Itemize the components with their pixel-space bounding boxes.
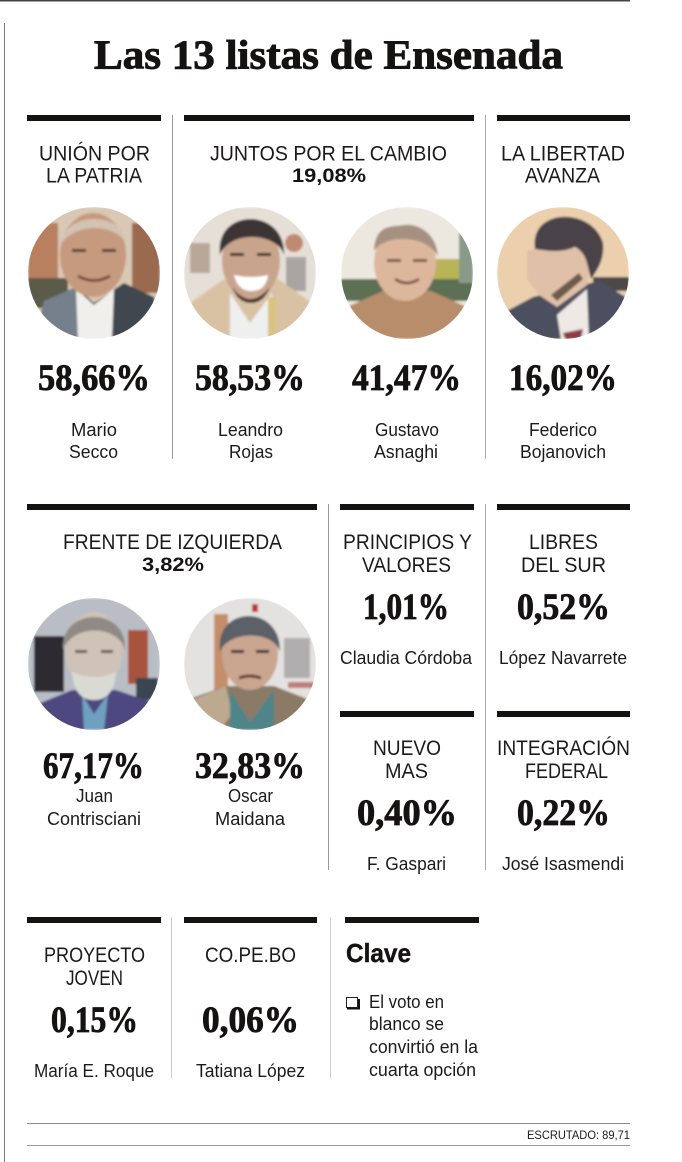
percentage: 67,17% [43,746,144,787]
panel: La Libertad Avanza: LA LIBERTAD [501,142,625,166]
footer note: ESCRUTADO: 89,71 [527,1128,630,1142]
candidate name: Maidana [215,809,286,829]
panel: Clave [345,917,479,1080]
candidate name: Oscar [228,786,273,806]
panel: Clave: blanco se [369,1014,444,1034]
candidate name: Federico [529,420,597,440]
panel: Integración Federal: FEDERAL [525,760,608,783]
percentage: 16,02% [509,358,617,399]
panel: Frente de Izquierda [27,504,317,829]
panel: Unión por la Patria: LA PATRIA [46,164,142,188]
candidate name [520,420,606,462]
candidate name [218,420,283,462]
panel: Proyecto Joven [27,917,161,1081]
panel: Principios y Valores: 1,01% [363,587,449,628]
panel: Clave: convirtió en la [369,1037,479,1057]
candidate name: Mario [71,420,117,440]
panel: La Libertad Avanza [497,115,630,462]
panel: Proyecto Joven: JOVEN [66,967,123,990]
panel: Co.Pe.Bo: CO.PE.BO [205,944,296,967]
panel: Proyecto Joven: PROYECTO [44,944,145,967]
panel: Nuevo MAS: 0,40% [357,793,457,834]
candidate name [69,420,118,462]
panel: Libres del Sur: DEL SUR [521,554,606,577]
portrait: Mario Secco [28,207,160,339]
panel: Libres del Sur: 0,52% [517,587,610,628]
candidate name: Rojas [229,442,273,462]
icon: checkbox [346,998,359,1008]
panel: Principios y Valores: PRINCIPIOS Y [343,531,472,554]
panel: Integración Federal: INTEGRACIÓN [497,737,630,760]
panel: Clave: cuarta opción [369,1060,476,1080]
panel: Clave: Clave [346,938,411,968]
percentage: 58,53% [195,358,305,399]
portrait: Gustavo Asnaghi [341,207,473,339]
panel: La Libertad Avanza: AVANZA [525,164,600,188]
candidate name: Juan [76,786,113,806]
panel: Proyecto Joven: María E. Roque [34,1061,154,1081]
panel: Co.Pe.Bo: 0,06% [202,1000,299,1041]
candidate name [215,786,286,829]
candidate name: Leandro [218,420,283,440]
panel: Principios y Valores [340,504,474,668]
panel: Clave: El voto en [369,992,444,1012]
candidate name: Bojanovich [520,442,606,462]
list total: 19,08% [292,166,366,187]
percentage: 32,83% [195,746,305,787]
portrait: Federico Bojanovich [497,207,629,339]
panel: Unión por la Patria: UNIÓN POR [39,142,150,166]
portrait: Oscar Maidana [184,598,316,730]
panel: Nuevo MAS [340,711,474,874]
panel: Integración Federal [497,711,630,874]
panel: Libres del Sur: López Navarrete [499,648,627,668]
panel: Co.Pe.Bo: Tatiana López [196,1061,305,1081]
panel: Nuevo MAS: F. Gaspari [367,854,446,874]
candidate name: Asnaghi [374,442,438,462]
panel: Proyecto Joven: 0,15% [51,1000,138,1041]
panel: Principios y Valores: Claudia Córdoba [340,648,473,668]
panel: Unión por la Patria [27,115,161,462]
title: Las 13 listas de Ensenada [94,32,563,78]
list total: 3,82% [142,555,204,576]
panel: Integración Federal: 0,22% [517,793,610,834]
panel: Libres del Sur: LIBRES [529,531,598,554]
panel: Juntos por el Cambio: JUNTOS POR EL CAMBIO [210,142,447,166]
percentage: 58,66% [38,358,150,399]
candidate name: Gustavo [375,420,439,440]
panel: Nuevo MAS: NUEVO [373,737,441,760]
portrait: Juan Contrisciani [28,598,160,730]
panel: Juntos por el Cambio [184,115,474,462]
panel: Frente de Izquierda: FRENTE DE IZQUIERDA [63,531,282,554]
panel: Libres del Sur [497,504,630,668]
candidate name [47,786,141,829]
portrait: Leandro Rojas [184,207,316,339]
panel: Nuevo MAS: MAS [385,760,428,783]
percentage: 41,47% [352,358,461,399]
candidate name [374,420,439,462]
panel: Integración Federal: José Isasmendi [502,854,624,874]
candidate name: Secco [69,442,118,462]
panel: Co.Pe.Bo [184,917,317,1081]
candidate name: Contrisciani [47,809,141,829]
panel: Principios y Valores: VALORES [362,554,451,577]
